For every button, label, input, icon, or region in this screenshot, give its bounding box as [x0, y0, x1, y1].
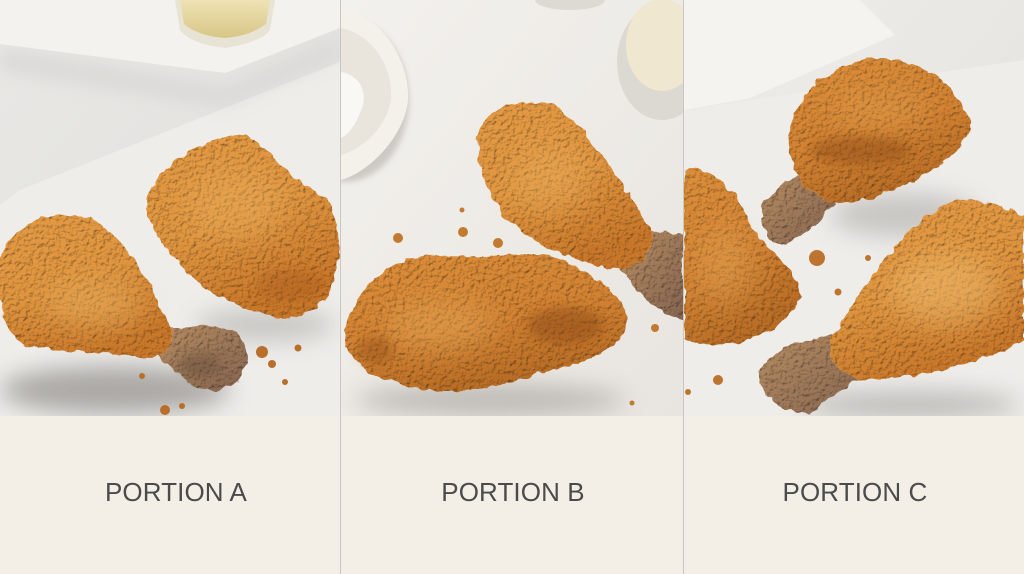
- crumbs C: [685, 250, 871, 395]
- chicken: thigh A: [147, 135, 339, 318]
- panel: portion A: [0, 0, 340, 416]
- chicken: left piece C: [684, 169, 800, 345]
- paper sheet C: [684, 0, 1024, 416]
- chicken: top piece C: [761, 58, 970, 245]
- caption panel B: [341, 416, 683, 574]
- icon: glass bowl of sauce: [535, 0, 683, 120]
- panel: portion C: [684, 0, 1024, 419]
- icon: glass of oil: [175, 0, 275, 48]
- chicken: drumstick B: [478, 102, 683, 320]
- chicken: thigh B: [345, 254, 628, 391]
- crumbs B: [393, 208, 659, 406]
- label: portion C: PORTION C: [783, 477, 927, 507]
- panel: portion B: [341, 0, 683, 416]
- top paper A: [0, 0, 340, 105]
- caption panel C: [684, 416, 1024, 574]
- chicken: drumstick A: [0, 215, 247, 390]
- crumbs A: [139, 344, 302, 415]
- chicken: drumstick C: [759, 200, 1024, 415]
- icon: white dish: [341, 28, 411, 184]
- label: portion A: PORTION A: [105, 477, 248, 507]
- paper sheet A: [0, 62, 340, 416]
- label: portion B: PORTION B: [441, 477, 585, 507]
- caption panel A: [0, 416, 340, 574]
